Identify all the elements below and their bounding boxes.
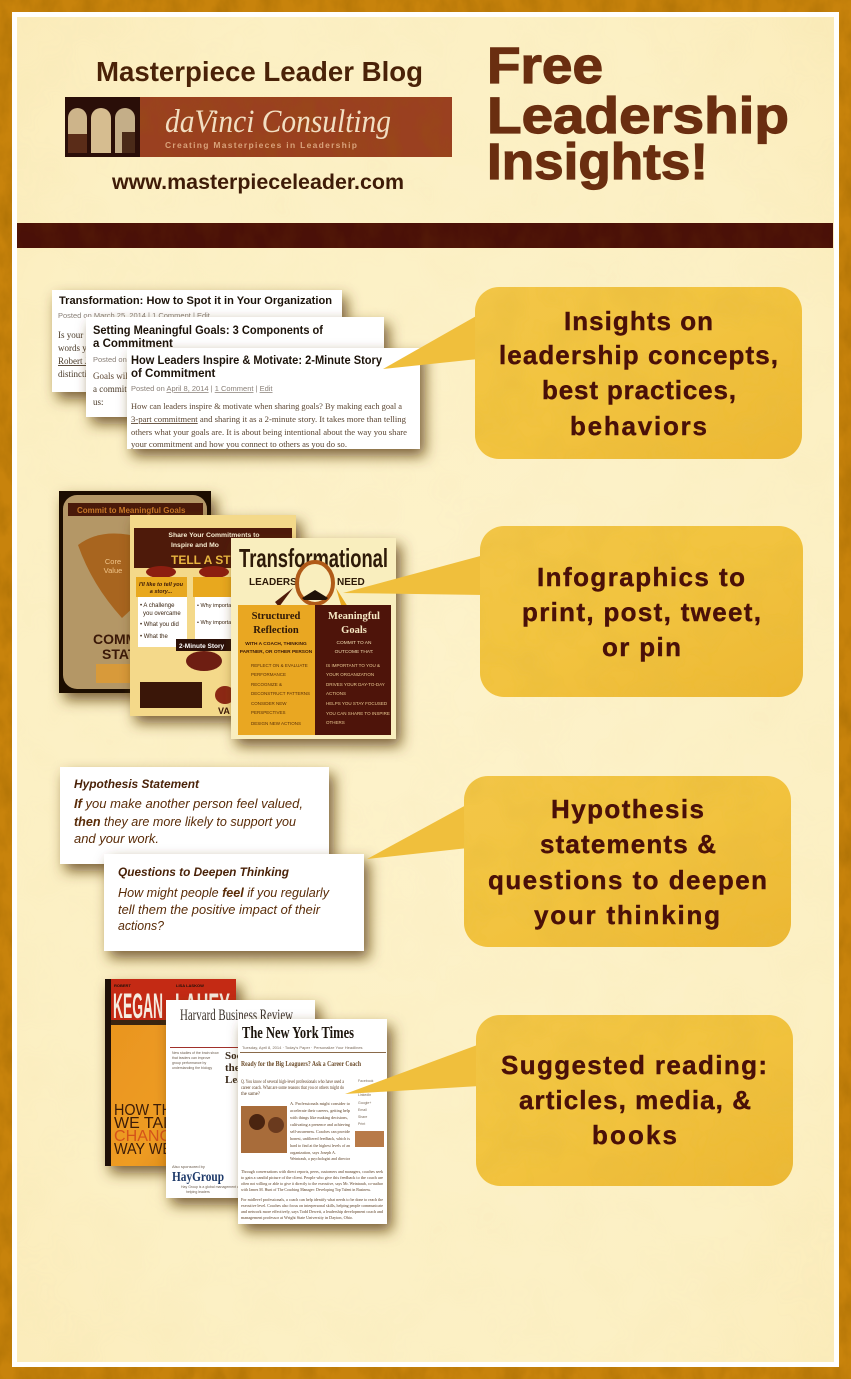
headline: Leadership <box>487 87 789 144</box>
thumbnail: transformational leaders need: Transformational <box>239 543 388 573</box>
post card: transformation: Robert J <box>58 356 89 366</box>
callout: suggested reading <box>345 1015 793 1186</box>
article: The New York Times: Tuesday, April 8, 2014 · Today's Paper · Personalize Your Headlines <box>242 1045 363 1050</box>
article: The New York Times: Ready for the Big Leaguers? Ask a Career Coach <box>241 1059 362 1068</box>
callout: infographics to print: print, post, tweet, <box>522 597 761 627</box>
post card: how leaders inspire: 3-part commitment and sharing it as a 2-minute story. It takes more than telling <box>131 414 407 424</box>
panel: blog post screenshots <box>52 290 420 449</box>
thumbnail: tell a story: I'll like to tell you <box>139 582 184 588</box>
article: The New York Times: with James M. Hunt of The Coaching Manager: Developing Top Talent in Business. <box>241 1187 371 1192</box>
article: Harvard Business Review: the <box>225 1062 240 1074</box>
post card: transformation: Posted on March 25, 2014 | 1 Comment | Edit <box>58 311 211 320</box>
article: The New York Times: with things like making decisions, <box>290 1115 348 1121</box>
article: The New York Times: to gain a candid picture of the client. People who give this feedback to the coach are <box>241 1175 383 1180</box>
article: Harvard Business Review: group performance by <box>172 1061 206 1065</box>
post card: setting meaningful goals: Setting Meaningful Goals: 3 Components of <box>93 325 323 337</box>
thumbnail: tell a story: Inspire and Mo <box>171 542 219 549</box>
thumbnail: transformational leaders need: PARTNER, OR OTHER PERSON <box>240 649 313 655</box>
post card: setting meaningful goals: us: <box>93 397 104 407</box>
callout: insights on leadership: behaviors <box>570 411 707 441</box>
article: The New York Times: Share <box>358 1115 367 1119</box>
logo banner: daVinci Consulting: Creating Masterpieces in Leadership <box>165 140 357 150</box>
thumbnail: transformational leaders need: NEED <box>337 577 365 588</box>
headline: Insights! <box>487 133 708 190</box>
article: The New York Times: Print <box>358 1122 365 1126</box>
callout: infographics to print: or pin <box>602 632 681 662</box>
thumbnail: commit to meaningful goals: Core <box>105 557 121 566</box>
card: questions to deepen thinking: tell them the positive impact of their <box>118 902 321 917</box>
callout: insights on leadership: Insights on <box>564 306 713 336</box>
article: The New York Times: A. Professionals might consider to <box>290 1101 351 1106</box>
post card: how leaders inspire: others what your goals are. It is about being intentional about the way you share <box>131 427 407 437</box>
callout: infographics to print: Infographics to <box>537 562 745 592</box>
article: The New York Times: Facebook <box>358 1079 374 1083</box>
thumbnail: tell a story <box>130 515 296 716</box>
article: The New York Times: honest, unfiltered feedback, which is <box>290 1136 350 1142</box>
thumbnail: transformational leaders need: YOUR ORGANIZATION <box>326 672 374 677</box>
thumbnail: transformational leaders need: OUTCOME THAT: <box>335 649 373 655</box>
callout: hypothesis statements: Hypothesis <box>551 794 704 824</box>
thumbnail: tell a story: • What you did <box>140 622 179 628</box>
callout: hypothesis statements: your thinking <box>534 900 720 930</box>
post card: how leaders inspire: How Leaders Inspire & Motivate: 2-Minute Story <box>131 355 383 367</box>
dark divider band <box>17 223 833 248</box>
thumbnail: tell a story: • A challenge <box>140 603 175 609</box>
callout: suggested reading: articles, media, & <box>519 1085 751 1115</box>
book cover: Kegan and Lahey: WAY WE <box>114 1141 172 1158</box>
post card: how leaders inspire: your commitment and how you connect to others as you do so. <box>131 439 347 449</box>
book cover: Kegan and Lahey: LISA LASKOW <box>176 983 204 988</box>
article: The New York Times: career coach. What are some reasons that you or others might do <box>241 1086 344 1091</box>
thumbnail: transformational leaders need: Reflection <box>253 625 299 636</box>
article: The New York Times: Weintraub, a psychologist and director <box>290 1156 350 1162</box>
article: The New York Times: Google+ <box>358 1101 371 1105</box>
post card: setting meaningful goals: Goals will <box>93 371 131 381</box>
thumbnail: transformational leaders need: REFLECT ON & EVALUATE <box>251 663 308 668</box>
post card: setting meaningful goals <box>86 317 384 417</box>
thumbnail: tell a story: VA <box>218 706 230 716</box>
article: The New York Times: the same? <box>241 1092 260 1097</box>
article: The New York Times: LinkedIn <box>358 1093 371 1097</box>
post card: how leaders inspire: How can leaders inspire & motivate when sharing goals? By making each goal a <box>131 401 402 411</box>
article: The New York Times: accelerate their careers, getting help <box>290 1108 351 1114</box>
post card: transformation <box>52 290 342 392</box>
thumbnail: tell a story: • Why importa <box>197 603 232 609</box>
thumbnail: tell a story: • What the <box>140 634 168 640</box>
header: blog title: Masterpiece Leader Blog <box>96 56 423 87</box>
thumbnail: tell a story: you overcame <box>143 611 181 617</box>
thumbnail: tell a story: TELL A ST <box>171 553 231 567</box>
post card: how leaders inspire <box>127 348 420 449</box>
thumbnail: transformational leaders need: WITH A COACH, THINKING <box>245 641 307 647</box>
thumbnail: transformational leaders need: COMMIT TO AN <box>337 640 372 646</box>
thumbnail: transformational leaders need <box>231 538 396 739</box>
thumbnail: transformational leaders need: CONSIDER NEW <box>251 701 287 706</box>
thumbnail: transformational leaders need: Structured <box>252 611 301 622</box>
header: website address: www.masterpieceleader.com <box>111 171 404 194</box>
callout: suggested reading: books <box>592 1120 677 1150</box>
article: Harvard Business Review: Also sponsored by <box>172 1164 205 1169</box>
thumbnail: commit to meaningful goals: Value <box>104 566 122 575</box>
book cover: Kegan and Lahey: CHANG <box>114 1128 172 1145</box>
article: The New York Times: often not willing or able to give it directly to the executive, says Mr. Weintraub, co-author <box>241 1181 383 1187</box>
article: The New York Times: Email <box>358 1108 367 1112</box>
article: Harvard Business Review: New studies of the brain show <box>172 1051 219 1055</box>
thumbnail: tell a story: 2-Minute Story <box>179 643 225 650</box>
article: The New York Times: executive level. Coaches also focus on interpersonal skills, helping people communicate <box>241 1203 383 1209</box>
thumbnail: commit to meaningful goals <box>59 491 211 693</box>
thumbnail: transformational leaders need: DESIGN NEW ACTIONS <box>251 721 301 726</box>
logo banner: daVinci Consulting <box>65 97 452 157</box>
book cover: Kegan and Lahey <box>105 979 236 1166</box>
panel: suggested reading thumbnails <box>105 979 387 1224</box>
book cover: Kegan and Lahey: LAHEY <box>175 987 230 1026</box>
article: The New York Times <box>238 1019 387 1224</box>
thumbnail: transformational leaders need: RECOGNIZE & <box>251 682 282 687</box>
panel: infographic thumbnails <box>59 491 396 739</box>
article: The New York Times: self-awareness. Coaches can provide <box>290 1129 350 1134</box>
article: Harvard Business Review: that leaders can improve <box>172 1056 210 1060</box>
logo banner: daVinci Consulting: daVinci Consulting <box>165 104 391 140</box>
card: hypothesis statement: If you make another person feel valued, <box>74 796 303 811</box>
article: The New York Times: The New York Times <box>242 1023 354 1042</box>
thumbnail: transformational leaders need: YOU CAN SHARE TO INSPIRE <box>326 711 390 716</box>
card: questions to deepen thinking: Questions to Deepen Thinking <box>118 865 290 879</box>
callout: hypothesis statements: statements & <box>540 829 716 859</box>
callout: hypothesis statements: questions to deepen <box>488 865 767 895</box>
thumbnail: transformational leaders need: ACTIONS <box>326 691 346 696</box>
thumbnail: tell a story: a story... <box>150 589 173 595</box>
article: The New York Times: For midlevel professionals, a coach can help identify what needs to be done to reach the <box>241 1197 383 1203</box>
article: Harvard Business Review: understanding the biology <box>172 1066 212 1070</box>
article: Harvard Business Review: helping leaders <box>186 1190 210 1194</box>
thumbnail: tell a story: • Why importa <box>197 620 232 626</box>
post card: setting meaningful goals: Posted on <box>93 355 127 364</box>
article: Harvard Business Review: HayGroup <box>172 1170 224 1185</box>
article: The New York Times: Through conversations with direct reports, peers, customers and managers, coaches seek <box>241 1169 384 1175</box>
book cover: Kegan and Lahey: WE TAL <box>114 1115 172 1132</box>
headline <box>487 37 789 190</box>
article: The New York Times: Q. You know of several high-level professionals who have used a <box>241 1080 345 1085</box>
panel: hypothesis and question cards <box>60 767 364 951</box>
post card: transformation: distinctio <box>58 369 92 379</box>
post card: transformation: Is your <box>58 330 83 340</box>
post card: setting meaningful goals: a Commitment <box>93 338 173 350</box>
callout: infographics to print <box>343 526 803 697</box>
card: questions to deepen thinking: actions? <box>118 918 165 933</box>
callout: insights on leadership <box>383 287 802 459</box>
thumbnail: transformational leaders need: DRIVES YOUR DAY-TO-DAY <box>326 682 385 687</box>
card: questions to deepen thinking <box>104 854 364 951</box>
callout: insights on leadership: leadership concepts, <box>499 340 778 370</box>
article: Harvard Business Review: Lea <box>225 1074 243 1086</box>
book cover: Kegan and Lahey: ROBERT <box>114 983 131 988</box>
thumbnail: transformational leaders need: LEADERS <box>249 577 297 588</box>
article: The New York Times: and network more effectively, says Todd Dewett, a leadership development coach and <box>241 1209 384 1215</box>
card: hypothesis statement: and your work. <box>74 831 159 846</box>
article: The New York Times: hard to find at the highest levels of an <box>290 1143 351 1148</box>
thumbnail: transformational leaders need: OTHERS <box>326 720 345 725</box>
article: The New York Times: management professor at Wright State University in Dayton, Ohio. <box>241 1215 353 1221</box>
callout: suggested reading: Suggested reading: <box>501 1050 767 1080</box>
thumbnail: transformational leaders need: Goals <box>341 625 367 636</box>
post card: transformation: Transformation: How to Spot it in Your Organization <box>59 295 332 307</box>
callout: insights on leadership: best practices, <box>542 375 736 405</box>
thumbnail: commit to meaningful goals: COMM <box>93 631 137 647</box>
book cover: Kegan and Lahey: KEGAN <box>113 987 163 1026</box>
article: The New York Times: organization, says Joseph A. <box>290 1150 336 1156</box>
article: The New York Times: cultivating a presence and achieving <box>290 1122 351 1127</box>
thumbnail: tell a story: Share Your Commitments to <box>168 532 260 539</box>
book cover: Kegan and Lahey: HOW TH <box>114 1102 172 1119</box>
thumbnail: transformational leaders need: DECONSTRUCT PATTERNS <box>251 691 310 696</box>
headline: Free <box>487 37 603 94</box>
thumbnail: transformational leaders need: HELPS YOU STAY FOCUSED <box>326 701 388 706</box>
thumbnail: transformational leaders need: PERSPECTIVES <box>251 710 286 715</box>
callout: hypothesis statements <box>367 776 791 947</box>
card: hypothesis statement <box>60 767 329 864</box>
thumbnail: transformational leaders need: IS IMPORTANT TO YOU & <box>326 663 380 668</box>
card: hypothesis statement: Hypothesis Statement <box>74 777 200 791</box>
thumbnail: commit to meaningful goals: STAT <box>102 646 137 662</box>
card: hypothesis statement: then they are more likely to support you <box>74 814 296 829</box>
post card: how leaders inspire: Posted on April 8, 2014 | 1 Comment | Edit <box>131 384 273 393</box>
article: Harvard Business Review <box>166 1000 315 1198</box>
thumbnail: transformational leaders need: Meaningful <box>328 611 380 622</box>
thumbnail: commit to meaningful goals: Commit to Meaningful Goals <box>77 506 186 515</box>
card: questions to deepen thinking: How might people feel if you regularly <box>118 885 330 900</box>
article: Harvard Business Review: Soc <box>225 1050 242 1062</box>
article: Harvard Business Review: Hay Group is a global management consulting <box>181 1185 253 1189</box>
thumbnail: transformational leaders need: PERFORMANCE <box>251 672 286 677</box>
article: Harvard Business Review: Harvard Business Review <box>180 1007 293 1024</box>
post card: setting meaningful goals: a commit <box>93 384 127 394</box>
post card: how leaders inspire: of Commitment <box>131 368 216 380</box>
post card: transformation: words y <box>58 343 87 353</box>
